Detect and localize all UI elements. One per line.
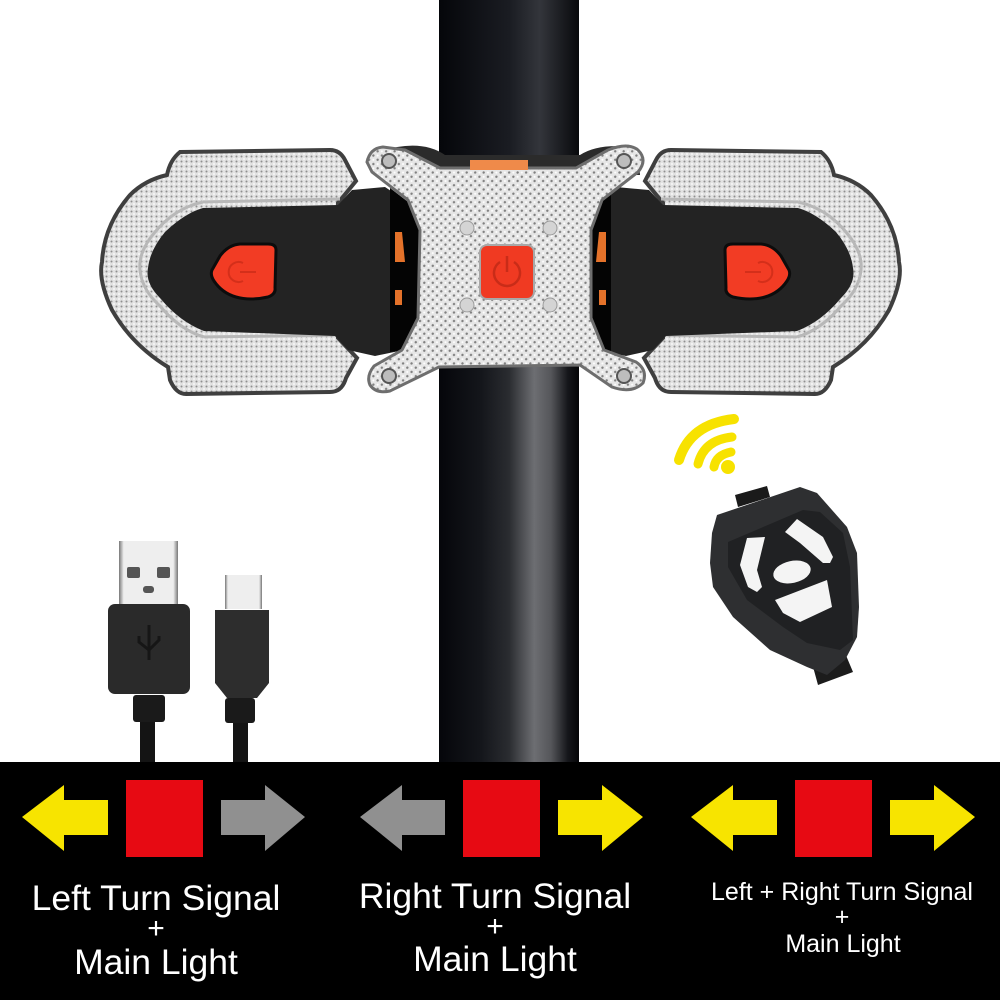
mode 1 label: Main Light bbox=[74, 942, 238, 982]
power button bbox=[211, 244, 276, 299]
black gap bbox=[579, 188, 611, 352]
strain relief bbox=[133, 695, 165, 722]
remote face bbox=[728, 510, 853, 650]
USB-A plug holes bbox=[127, 567, 170, 593]
left wing lamp bbox=[101, 150, 422, 394]
USB-A metal plug bbox=[119, 541, 178, 605]
mode 3 label bbox=[711, 878, 973, 958]
top bracket bbox=[378, 146, 640, 175]
power glyph bbox=[229, 262, 256, 282]
lens studs bbox=[460, 221, 557, 312]
mode 2 label: Right Turn Signal bbox=[359, 876, 631, 916]
bottom clip bbox=[812, 653, 853, 685]
micro cable bbox=[233, 720, 248, 765]
orange tab bbox=[470, 160, 528, 170]
power glyph bbox=[745, 262, 772, 282]
mode 2 label: + bbox=[486, 910, 504, 943]
mode 3: arrows and light bbox=[691, 780, 975, 857]
mode 2 label bbox=[359, 876, 631, 979]
micro strain relief bbox=[225, 698, 255, 723]
left button bbox=[740, 537, 765, 592]
mode 1: arrows and light bbox=[22, 780, 305, 857]
lamp lens bbox=[101, 150, 357, 394]
wireless remote bbox=[710, 486, 859, 685]
top clip bbox=[735, 486, 770, 507]
orange clip bbox=[395, 232, 405, 305]
mode 2 label: Main Light bbox=[413, 939, 577, 979]
pole bbox=[439, 0, 579, 764]
USB symbol bbox=[139, 625, 159, 660]
right wing lamp bbox=[579, 150, 900, 394]
icon: wireless signal bbox=[679, 419, 735, 474]
center lamp bbox=[367, 146, 644, 392]
mode 1 label: Left Turn Signal bbox=[32, 878, 280, 918]
USB-A cable bbox=[108, 541, 190, 765]
center power button bbox=[480, 245, 534, 299]
mode 3 label: + bbox=[835, 903, 849, 931]
micro metal plug bbox=[225, 575, 262, 609]
lamp lens bbox=[644, 150, 900, 394]
Micro-USB cable bbox=[215, 575, 269, 765]
black gap bbox=[390, 188, 422, 352]
mode 2: arrows and light bbox=[360, 780, 643, 857]
remote body bbox=[710, 487, 859, 675]
rubber body bbox=[148, 187, 422, 356]
USB-A housing bbox=[108, 604, 190, 694]
corner screws bbox=[382, 154, 631, 383]
center lens bbox=[367, 146, 644, 392]
cable bbox=[140, 720, 155, 765]
power button bbox=[725, 244, 790, 299]
orange clip bbox=[596, 232, 606, 305]
micro housing bbox=[215, 610, 269, 698]
panel: light modes bbox=[0, 762, 1000, 1000]
mode 1 label: + bbox=[147, 912, 165, 945]
mode 3 label: Main Light bbox=[785, 930, 901, 958]
mode 3 label: Left + Right Turn Signal bbox=[711, 878, 973, 906]
lens inner rim bbox=[140, 199, 340, 337]
rubber body bbox=[579, 187, 854, 356]
mode 1 label bbox=[32, 878, 280, 982]
top button bbox=[785, 519, 833, 563]
power glyph bbox=[494, 256, 520, 286]
bottom button bbox=[775, 580, 832, 622]
center button bbox=[771, 557, 813, 587]
lens inner rim bbox=[661, 199, 861, 337]
